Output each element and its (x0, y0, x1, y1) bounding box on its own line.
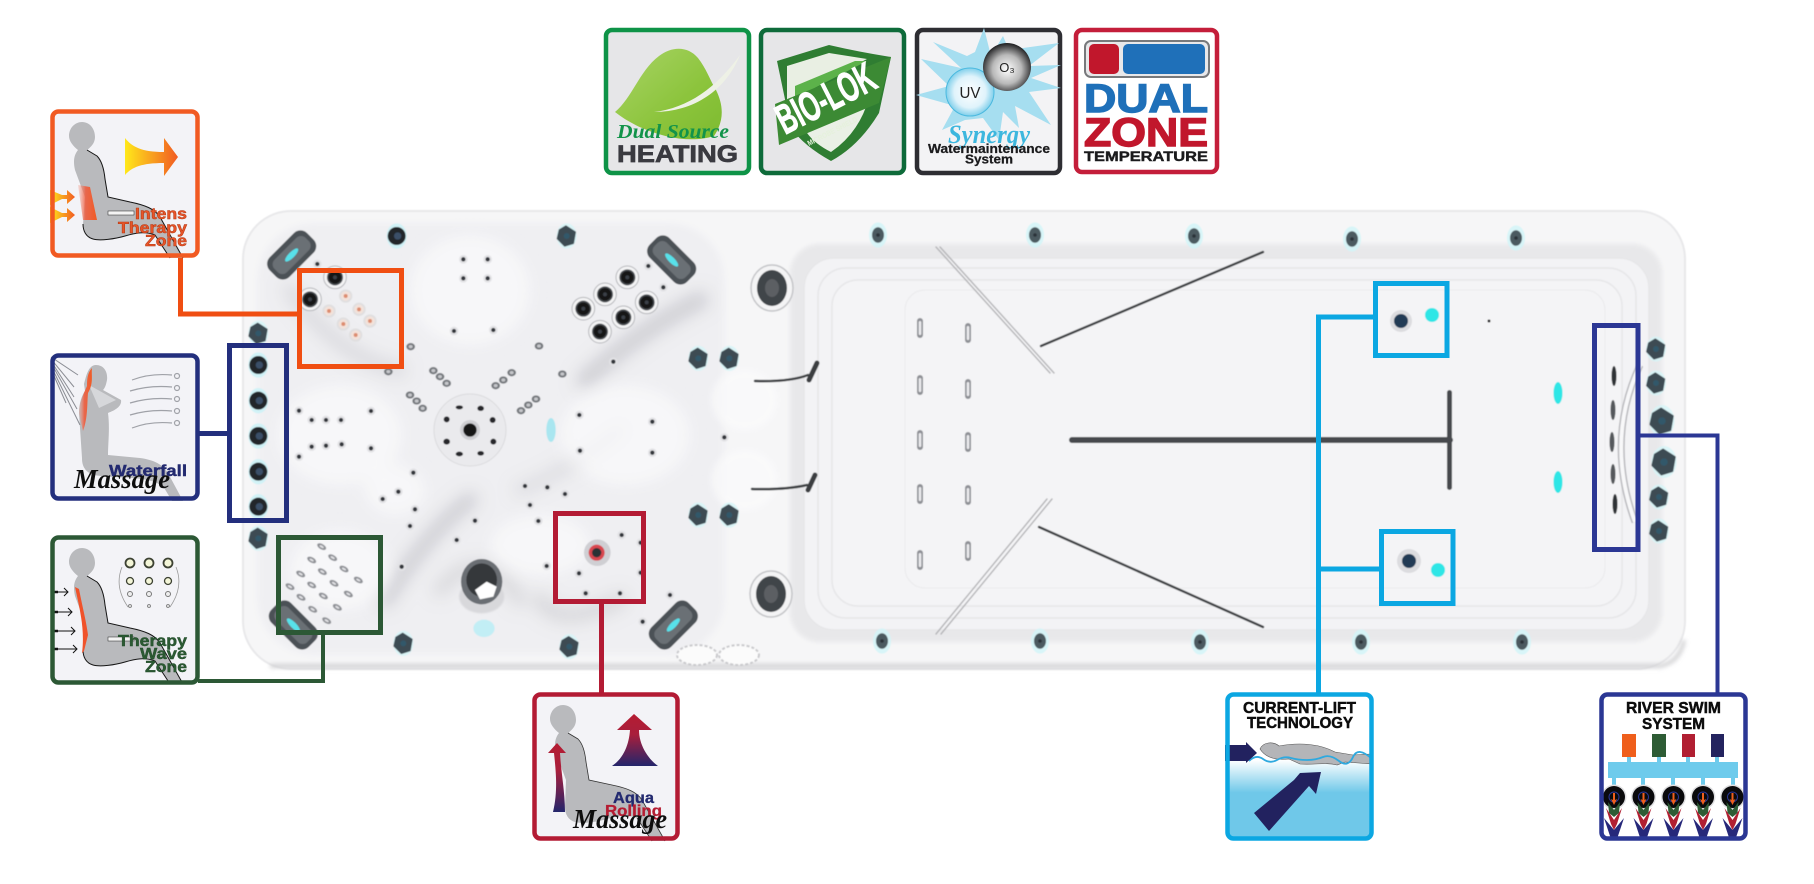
arrow: rolling up (612, 714, 658, 766)
badge background (917, 30, 1060, 173)
figure: swimmer (1260, 743, 1373, 765)
badge: dual source heating (606, 30, 749, 173)
swim section (790, 244, 1662, 642)
panel: therapy wave zone (51, 538, 198, 684)
green zone jets (284, 542, 364, 625)
text: massage: Massage (73, 464, 170, 494)
icon: uv bubble: UV (960, 85, 981, 102)
small seat jets (295, 255, 729, 626)
figure: seated person (550, 705, 665, 841)
text: title (1626, 700, 1721, 733)
banner (775, 57, 891, 145)
text: therapy wave zone: Wave (140, 646, 187, 663)
panel border (52, 112, 198, 256)
text: intens therapy zone (118, 206, 187, 250)
panel background (534, 694, 678, 838)
panel background (1228, 694, 1372, 838)
text: synergy: Synergy (948, 120, 1030, 149)
text: title: RIVER SWIM (1626, 700, 1721, 717)
panel border (52, 356, 198, 498)
large therapy jets (299, 260, 668, 343)
shield inner light (787, 53, 867, 100)
arrow: lift (1254, 772, 1321, 831)
wave line (1249, 752, 1372, 764)
icon: ozone bubble (983, 43, 1031, 91)
shell lower rim shadow (270, 640, 1684, 666)
heat zone on back (78, 185, 97, 220)
panel border (52, 538, 198, 682)
text: dual: DUAL (1084, 77, 1208, 121)
text: massage: Massage (572, 804, 667, 834)
water (1228, 760, 1372, 838)
central jet ring (434, 394, 506, 466)
icon: uv bubble (946, 68, 994, 116)
aqua rolling jet (584, 539, 611, 566)
swim entry seat (711, 368, 779, 512)
spa shading swirls (290, 290, 700, 615)
callout: intens therapy zone highlight and connector (180, 258, 402, 366)
text: bio-lok: BIO-LOK (768, 53, 884, 143)
cyan center light (546, 418, 556, 442)
jets with arrows (1602, 784, 1745, 839)
badge background (761, 30, 904, 173)
wave dot grid (119, 558, 179, 608)
text: title: TECHNOLOGY (1247, 715, 1354, 732)
panel: waterfall massage (51, 356, 198, 501)
panel: aqua rolling massage (534, 694, 678, 841)
text: temperature: TEMPERATURE (1084, 149, 1208, 164)
figure: seated person (69, 122, 183, 258)
arrows: heat at back (50, 190, 75, 223)
current lift jets (1390, 310, 1490, 573)
panel background (1602, 694, 1746, 838)
text: dual source: Dual Source (616, 121, 729, 143)
air control star knobs (248, 223, 739, 659)
grab handles (752, 363, 817, 490)
lane T-bar (1069, 390, 1453, 490)
text: rolling: Rolling (605, 803, 662, 820)
callout: aqua rolling highlight and connector (556, 514, 644, 693)
panel: river swim system (1602, 694, 1746, 839)
text: intens therapy zone: Therapy (118, 220, 187, 237)
colour zone blocks (1622, 734, 1724, 757)
text: zone: ZONE (1084, 111, 1208, 155)
swim perimeter jets (869, 222, 1531, 655)
water jets (130, 374, 180, 428)
heat on back (75, 587, 88, 653)
water on back (79, 368, 92, 431)
text: system: System (965, 152, 1013, 166)
callout: waterfall highlight and connector (198, 346, 286, 520)
text: therapy wave zone (118, 633, 187, 676)
step bench jets (917, 318, 971, 570)
panel: current-lift technology (1225, 694, 1373, 838)
panel border (534, 694, 678, 838)
icon: ozone bubble: O₃ (999, 60, 1015, 75)
panel background (52, 356, 198, 498)
panel border (1602, 694, 1746, 838)
panel: intens therapy zone (50, 112, 198, 258)
icon: water splash (916, 28, 1061, 140)
panel background (52, 112, 198, 256)
text: title (1243, 700, 1357, 732)
badge: bio-lok (761, 30, 904, 173)
cyan lights (1425, 308, 1562, 577)
arrows: wave sequence (51, 588, 77, 653)
arrow: current at swimmer (1225, 742, 1257, 763)
callout: river swim highlight and connector (1594, 326, 1718, 693)
manifold (1608, 757, 1738, 786)
figure: seated person (69, 548, 183, 684)
text: therapy wave zone: Therapy (118, 633, 187, 650)
text: therapy wave zone: Zone (145, 659, 187, 676)
diagonal rails (936, 247, 1263, 634)
icon: shield (777, 45, 891, 161)
text: intens therapy zone: Zone (145, 233, 187, 250)
orange zone jets (322, 289, 377, 342)
tub shell (243, 211, 1685, 669)
text: microbe shield: MICROBE SHIELD (806, 115, 859, 148)
twin ovals (677, 645, 759, 665)
badge background (606, 30, 749, 173)
text: title: SYSTEM (1642, 716, 1705, 733)
text: heating: HEATING (617, 141, 738, 168)
text: aqua: Aqua (613, 790, 654, 807)
triple jet rows (384, 342, 567, 414)
text: watermaintenance: Watermaintenance (928, 142, 1050, 156)
text: intens therapy zone: Intens (135, 206, 187, 223)
hot tub and swim spa top view (243, 211, 1685, 669)
panel background (52, 538, 198, 682)
arrow: rising on back (548, 743, 566, 812)
spa basin (258, 224, 724, 654)
spa fixtures (248, 223, 739, 659)
arrow: radiating heat (125, 138, 178, 176)
badge: dual zone temperature (1076, 30, 1217, 172)
skimmer filter (459, 559, 504, 637)
waterfall lines (51, 357, 80, 425)
leaf highlight (654, 55, 740, 112)
floor drains (750, 265, 793, 617)
panel border (1228, 694, 1372, 838)
figure: person with arms raised (79, 365, 183, 501)
badge background (1076, 30, 1217, 172)
callout: current lift highlights and connector (1318, 284, 1453, 693)
callout: therapy wave highlight and connector (198, 538, 380, 681)
badge: synergy (916, 28, 1061, 173)
text: waterfall: Waterfall (109, 463, 187, 480)
river swim curved bar (1610, 365, 1640, 522)
text: title: CURRENT-LIFT (1243, 700, 1357, 717)
icon: leaf (615, 49, 722, 139)
headrest pillows (263, 226, 702, 654)
river swim star jets (1646, 336, 1677, 544)
icon: temperature zones bar (1085, 41, 1209, 77)
spa seat highlights (278, 235, 690, 610)
waterfall jets (248, 223, 407, 519)
